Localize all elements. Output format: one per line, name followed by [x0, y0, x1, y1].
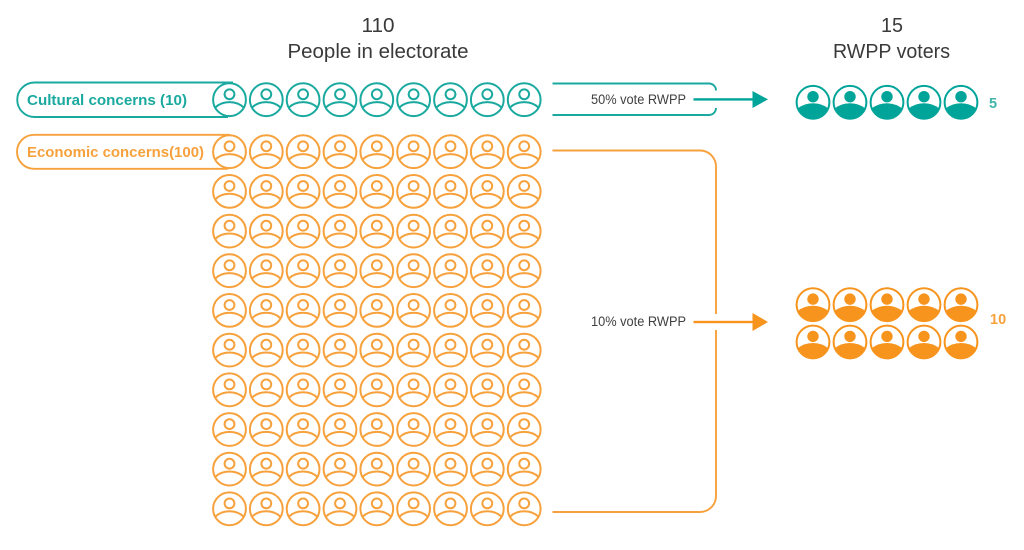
heading: people in electorate: 110: [362, 14, 394, 37]
label pill: economic concerns: Economic concerns(100): [27, 145, 204, 161]
count: 5: 5: [989, 96, 997, 112]
icon grid: economic concerns electorate: [213, 135, 541, 525]
label pill: economic concerns: [17, 135, 230, 169]
arrow: cultural to voters: [694, 91, 768, 108]
heading: people in electorate: People in electorate: [288, 40, 468, 63]
text: 50% vote RWPP: 50% vote RWPP: [591, 92, 686, 107]
label pill: cultural concerns: [17, 82, 233, 117]
heading: RWPP voters: RWPP voters: [833, 40, 950, 63]
icon row: cultural concerns electorate: [213, 83, 541, 116]
icon row: cultural RWPP voters: [797, 86, 977, 119]
heading: RWPP voters: [833, 14, 950, 63]
count: 10: 10: [990, 312, 1006, 328]
arrow: economic to voters: [694, 313, 768, 331]
bracket: cultural concerns: [552, 84, 716, 115]
text: 10% vote RWPP: 10% vote RWPP: [591, 314, 686, 329]
icon grid: economic RWPP voters: [797, 288, 977, 359]
heading: people in electorate: [288, 14, 468, 63]
heading: RWPP voters: 15: [881, 14, 903, 37]
label pill: cultural concerns: Cultural concerns (10): [27, 93, 187, 109]
bracket: economic concerns: [552, 150, 716, 512]
